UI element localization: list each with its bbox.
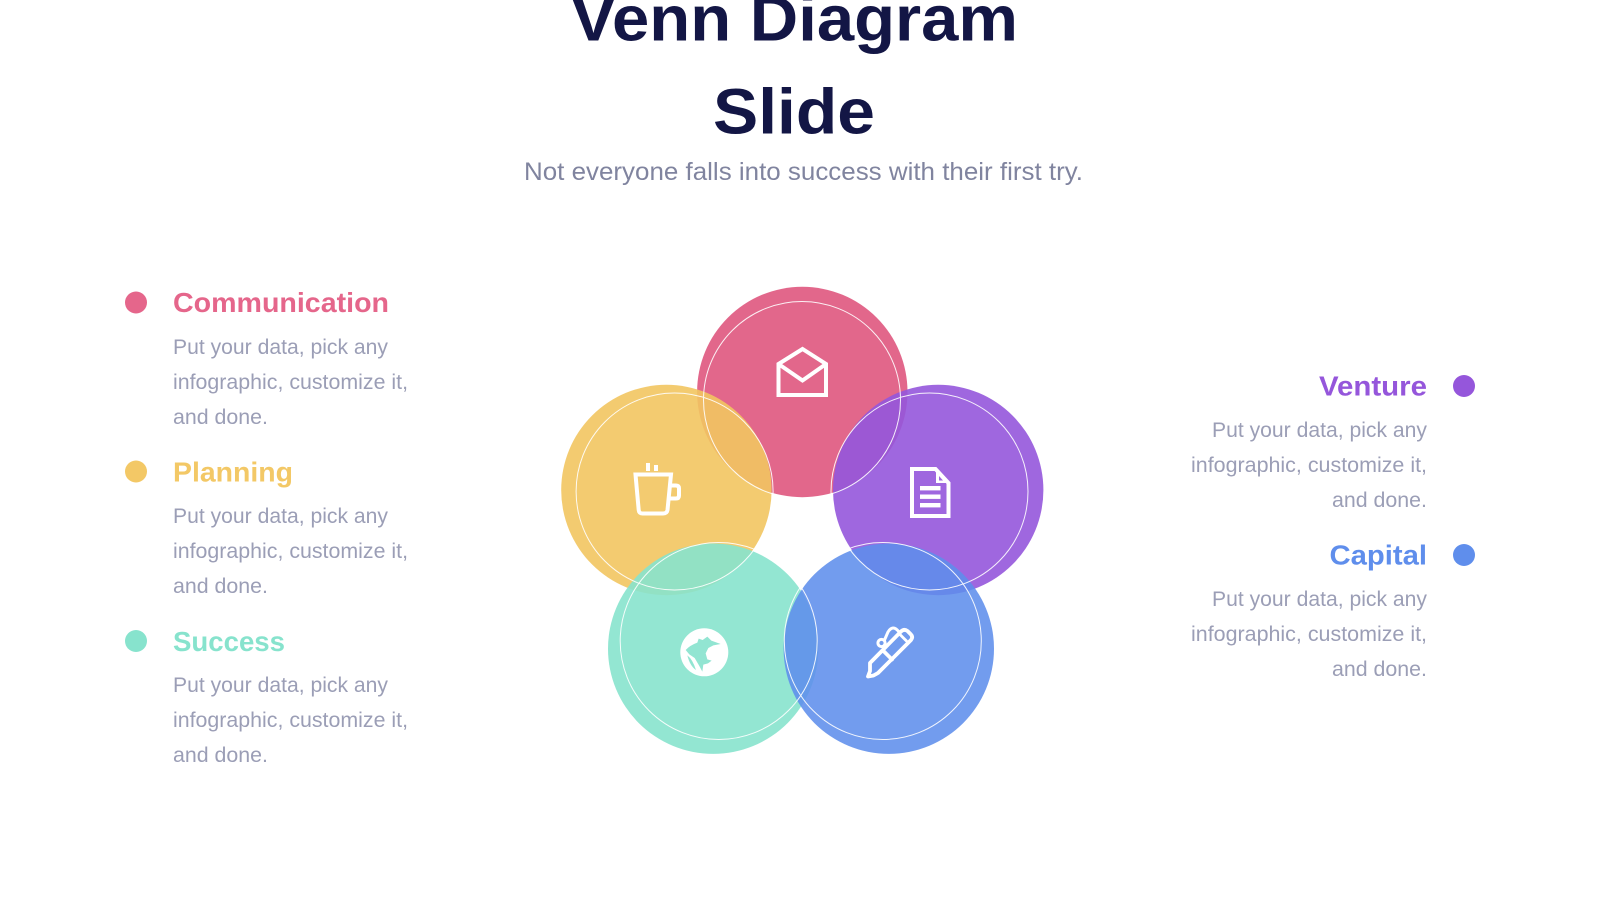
dot: communication (125, 292, 147, 314)
chart: five-circle venn diagram (561, 287, 1043, 754)
text: communication: Put your data, pick any (173, 335, 388, 359)
heading: venture: Venture (1319, 370, 1427, 402)
heading: capital: Capital (1330, 540, 1427, 570)
title: Slide (713, 76, 875, 148)
panel: success (125, 626, 408, 767)
dot: venture (1453, 375, 1475, 397)
text: success (173, 673, 408, 767)
text: capital: and done. (1332, 657, 1427, 681)
outline rings (576, 302, 1028, 740)
text: communication: and done. (173, 405, 268, 429)
text: venture (1191, 418, 1427, 512)
text: venture: infographic, customize it, (1191, 453, 1427, 477)
panel: venture (1191, 370, 1475, 512)
icon: coffee cup (636, 463, 679, 514)
panel: capital (1191, 540, 1475, 681)
title (571, 0, 1018, 148)
text: venture: and done. (1332, 488, 1427, 512)
circle: communication (697, 287, 908, 497)
text: communication: infographic, customize it, (173, 370, 408, 394)
dot: success (125, 630, 147, 652)
icon: pen (868, 628, 912, 676)
heading: success: Success (173, 626, 285, 657)
text: planning: infographic, customize it, (173, 539, 408, 563)
dot: planning (125, 460, 147, 482)
text: venture: Put your data, pick any (1212, 418, 1427, 442)
text: success: infographic, customize it, (173, 708, 408, 732)
text: planning (173, 504, 408, 598)
circle: planning (561, 385, 772, 595)
text: capital: infographic, customize it, (1191, 622, 1427, 646)
text: success: Put your data, pick any (173, 673, 388, 697)
dot: capital (1453, 544, 1475, 566)
text: capital: Put your data, pick any (1212, 587, 1427, 611)
icon: envelope (778, 349, 826, 395)
text: planning: Put your data, pick any (173, 504, 388, 528)
panel: planning (125, 456, 408, 598)
heading: communication: Communication (173, 287, 389, 318)
icon: document (912, 469, 948, 516)
heading: planning: Planning (173, 456, 293, 488)
text: communication (173, 335, 408, 429)
icon: globe (680, 628, 728, 676)
text: capital (1191, 587, 1427, 681)
subtitle: Not everyone falls into success with their first try. (524, 158, 1083, 186)
circle: venture (833, 385, 1043, 595)
panel: communication (125, 287, 408, 429)
text: planning: and done. (173, 574, 268, 598)
text: success: and done. (173, 743, 268, 767)
circle: success (608, 544, 818, 754)
circle: capital (784, 544, 994, 754)
